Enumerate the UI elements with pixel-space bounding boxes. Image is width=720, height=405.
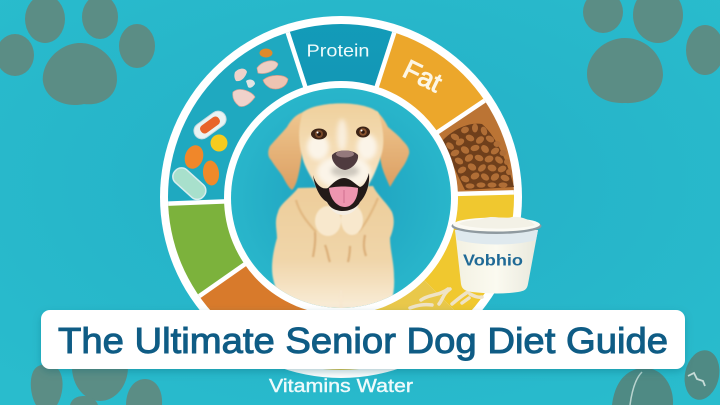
dog right ear [376,111,409,187]
food: protein pieces [233,48,288,107]
cup body [455,230,538,294]
dog mouth [313,173,369,212]
subtitle: Vitamins Water [269,376,413,396]
dog head [299,103,383,214]
paw print: top left [0,0,155,105]
label: Fat: Fat [398,54,447,98]
title banner [41,310,685,369]
food: supplement capsules [170,108,229,203]
dog chest fur shading [295,198,379,263]
dog face highlights [307,119,377,189]
dog eyes [311,126,370,140]
cup upper band [455,230,538,244]
dog left ear [268,112,304,190]
cup rim [452,218,542,234]
dog chin [329,204,359,215]
food: oats [410,289,482,308]
yogurt top [459,217,535,229]
yogurt cup [452,217,542,294]
cup label: Vobhio [463,252,523,270]
label: Protein: Protein [306,40,370,60]
dog illustration [268,103,409,320]
dog neck folds [315,205,363,236]
title text: The Ultimate Senior Dog Diet Guide [58,320,668,361]
paw print: bottom right [612,347,720,405]
dog muzzle grey [331,165,359,177]
dog body [272,186,394,320]
paw print: bottom left [31,333,162,405]
food: kibble [443,124,514,190]
wheel white base [160,16,522,378]
dog tongue [329,186,358,207]
inner teal circle [231,88,451,308]
inner white ring [224,81,458,315]
nutrition wheel [160,16,522,378]
wheel segments [168,24,514,370]
paw print: top right [583,0,720,103]
dog nose [332,150,358,170]
